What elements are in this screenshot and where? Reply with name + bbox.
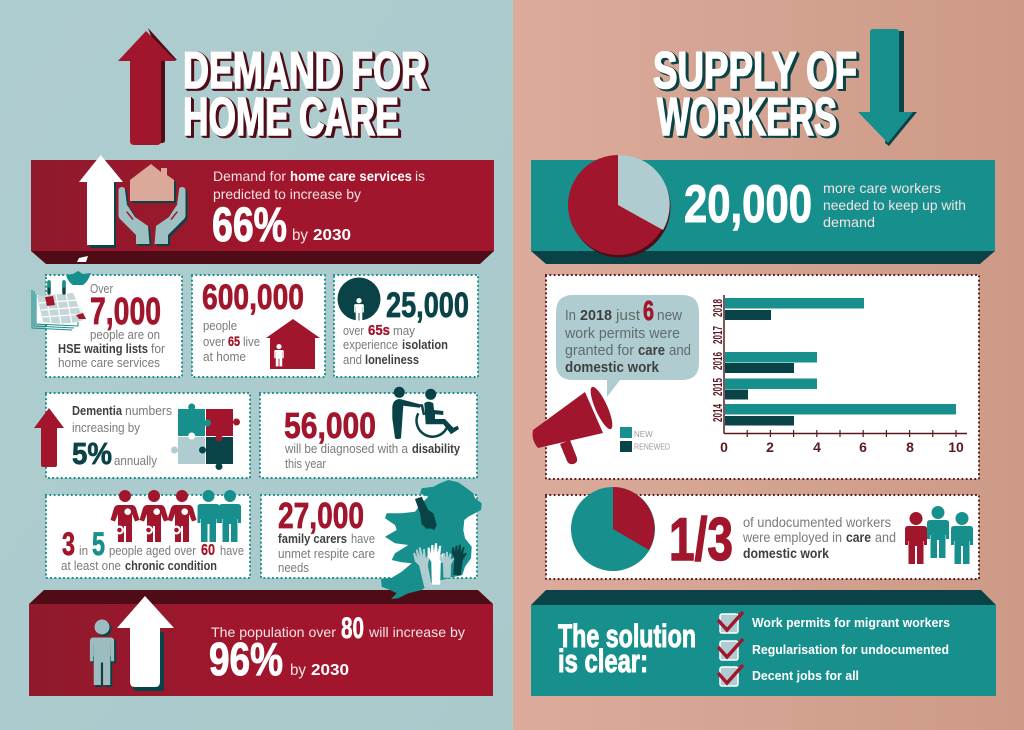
checklist item: decent jobs: Decent jobs for all [752, 668, 859, 683]
background: left half [0, 0, 513, 730]
icon: puzzle [171, 404, 240, 470]
checklist item: regularisation [718, 639, 949, 660]
panel: 20,000 banner [531, 155, 995, 264]
decorative chip [77, 256, 88, 262]
text: more care workers: demand [823, 214, 875, 230]
stat: 96% by 2030: 2030 [311, 662, 349, 679]
text: undocumented workers: of undocumented workers [743, 514, 891, 530]
chart: permits bar chart: 2018 [710, 299, 725, 317]
chart: permits bar chart: 2015 [710, 378, 725, 396]
text: 7,000 people [58, 281, 166, 370]
title: supply of workers: SUPPLY OF [653, 42, 857, 100]
callout: speech bubble: care [638, 342, 665, 359]
text: dementia numbers: annually [114, 453, 157, 468]
text: 27,000 carers: needs [278, 560, 309, 575]
text: 3 in 5 people: in [79, 543, 88, 558]
stat: 66% by 2030: 2030 [313, 227, 351, 244]
callout: speech bubble: In [565, 307, 576, 324]
text: demand predicted: home care services [290, 168, 412, 184]
chart: permits bar chart: 2014 [710, 404, 725, 422]
text: 3 in 5 people: people aged over [109, 543, 197, 558]
text: 600,000 people: over [203, 334, 226, 349]
text: demand predicted: Demand for [213, 168, 286, 184]
title: supply of workers: WORKERS [657, 87, 837, 147]
text: 7,000 people: home care services [58, 355, 160, 370]
text: 3 in 5 people: 60 [201, 542, 215, 559]
text: 3 in 5 people: chronic condition [125, 558, 217, 573]
text: undocumented workers: were employed in [742, 529, 842, 545]
text: 25,000 over 65s: and [343, 352, 362, 367]
chart: permits bar chart [710, 295, 967, 455]
icon: three people [905, 506, 973, 564]
panel: supply of workers heading [653, 29, 917, 147]
text: 7,000 people: people are on [90, 327, 160, 342]
legend [620, 427, 670, 452]
heading: the solution is clear: The solution [558, 618, 696, 654]
callout: speech bubble: and [669, 342, 691, 359]
text: 27,000 carers: 27,000 [278, 495, 364, 536]
panel: one third undocumented [546, 487, 979, 579]
text: 600,000 people: 600,000 [202, 278, 304, 317]
text: 7,000 people: 7,000 [90, 291, 161, 333]
panel: 3 in 5 chronic condition [46, 490, 250, 578]
text: 3 in 5 people [61, 526, 244, 573]
icon: house with person [266, 319, 320, 369]
icon: person [90, 620, 116, 687]
callout: speech bubble: 6 [643, 295, 654, 326]
text: 56,000 diagnosed [284, 405, 461, 471]
panel: work permits chart [533, 275, 979, 479]
heading: the solution is clear: is clear: [558, 643, 648, 679]
callout: speech bubble: granted for [565, 342, 634, 359]
stat: 66% by 2030 [212, 199, 351, 252]
text: 600,000 people [202, 278, 304, 364]
text: 25,000 over 65s: over [343, 323, 365, 338]
text: 25,000 over 65s: may [393, 323, 415, 338]
icon: red people with conditions [110, 490, 196, 542]
text: 600,000 people: 65 [228, 333, 240, 349]
text: demand predicted: is [415, 168, 425, 184]
background: right half [513, 0, 1024, 730]
text: population over 80: 80 [341, 612, 364, 645]
chart: permits bar chart: 2017 [710, 326, 725, 344]
text: undocumented workers [742, 514, 896, 561]
chart: permits bar chart: 0 [720, 439, 728, 455]
text: undocumented workers: and [875, 529, 896, 545]
chart: permits bar chart: 2016 [710, 352, 725, 370]
text: 7,000 people: Over [90, 281, 114, 296]
icon: red up arrow [34, 408, 64, 467]
stat: 1/3: 1/3 [669, 506, 733, 573]
text: 25,000 over 65s [343, 286, 469, 367]
stat: 20,000: 20,000 [684, 175, 812, 234]
text: undocumented workers: care [846, 529, 871, 545]
icon: down arrow [858, 29, 917, 146]
icon: megaphone [533, 385, 616, 464]
panel: 66% banner [31, 155, 494, 264]
icon: house in hands [118, 164, 188, 246]
panel: 27,000 family carers [261, 495, 477, 578]
callout: speech bubble: new [657, 307, 682, 324]
callout: speech bubble: just [615, 307, 641, 324]
chart: permits bar chart: 2 [766, 439, 774, 455]
title: supply of workers [653, 42, 857, 147]
title: demand for home care [183, 42, 427, 147]
text: 25,000 over 65s: isolation [402, 337, 448, 352]
stat: 96% by 2030 [209, 633, 349, 685]
panel: 7,000 waiting lists [32, 271, 182, 377]
text: 3 in 5 people: 3 [62, 526, 75, 562]
callout: speech bubble [556, 295, 699, 397]
text: more care workers: more care workers [823, 180, 941, 196]
text: demand predicted: predicted to increase by [213, 186, 361, 202]
checklist item: decent jobs [718, 665, 859, 686]
panel: 600,000 live at home [192, 275, 325, 377]
panel: demand for home care heading [118, 28, 427, 147]
checklist item: work permits [718, 612, 950, 633]
callout: speech bubble: 2018 [580, 307, 612, 324]
text: 56,000 diagnosed: this year [285, 456, 327, 471]
text: 25,000 over 65s: loneliness [365, 352, 419, 367]
heading: the solution is clear [558, 618, 696, 679]
panel: 96% banner [29, 590, 493, 696]
panel: 25,000 isolation [334, 275, 478, 377]
text: 3 in 5 people: 5 [92, 526, 105, 562]
text: 600,000 people: people [203, 318, 237, 333]
chart: one-third pie [571, 487, 655, 571]
text: 25,000 over 65s: 25,000 [386, 286, 469, 325]
chart: permits bar chart: 10 [948, 439, 964, 455]
text: 7,000 people: for [151, 341, 166, 356]
text: dementia numbers: 5% [72, 436, 112, 471]
text: more care workers: needed to keep up with [823, 197, 966, 213]
title: demand for home care: DEMAND FOR [183, 42, 427, 100]
icon: carer and wheelchair [392, 387, 459, 439]
icon: teal people [198, 490, 241, 542]
text: 56,000 diagnosed: will be diagnosed with a [284, 441, 409, 456]
chart: permits bar chart: 8 [906, 439, 914, 455]
icon: calendar [32, 271, 91, 330]
title: demand for home care: HOME CARE [183, 87, 399, 147]
text: 25,000 over 65s: 65s [368, 322, 390, 339]
icon: map of Ireland with hands [381, 480, 482, 599]
text: 27,000 carers: have [351, 531, 375, 546]
text: population over 80: The population over [211, 624, 336, 640]
legend: RENEWED [634, 442, 670, 452]
text: 3 in 5 people: have [220, 543, 244, 558]
text: dementia numbers [72, 403, 172, 471]
chart: pie with shadow [568, 155, 670, 258]
text: 56,000 diagnosed: disability [412, 441, 461, 456]
text: 27,000 carers [278, 495, 375, 575]
text: 600,000 people: live [243, 334, 260, 349]
chart: permits bar chart: 4 [813, 439, 821, 455]
text: population over 80: will increase by [368, 624, 465, 640]
text: dementia numbers: Dementia [72, 403, 123, 418]
text: 27,000 carers: unmet respite care [278, 546, 375, 561]
callout: speech bubble: domestic work [565, 359, 660, 376]
text: 56,000 diagnosed: 56,000 [284, 405, 376, 446]
text: undocumented workers: domestic work [743, 545, 829, 561]
icon: white up arrow [79, 155, 123, 248]
text: more care workers [823, 180, 966, 230]
text: 7,000 people: HSE waiting lists [58, 341, 148, 356]
checklist item: work permits: Work permits for migrant workers [752, 615, 950, 630]
text: 600,000 people: at home [203, 349, 246, 364]
checklist item: regularisation: Regularisation for undocumented [752, 642, 949, 657]
text: demand predicted [213, 168, 425, 202]
text: dementia numbers: increasing by [72, 420, 140, 435]
text: 3 in 5 people: at least one [61, 558, 121, 573]
callout: speech bubble: work permits were [564, 325, 680, 342]
stat: 66% by 2030: 66% [212, 199, 287, 252]
stat: 96% by 2030: by [290, 662, 306, 679]
stat: 66% by 2030: by [292, 227, 308, 244]
text: dementia numbers: numbers [125, 403, 172, 418]
icon: isolated person in circle [338, 278, 380, 321]
text: 27,000 carers: family carers [278, 531, 347, 546]
chart: permits bar chart: 6 [859, 439, 867, 455]
stat: 96% by 2030: 96% [209, 633, 283, 685]
panel: the solution banner [531, 590, 996, 696]
legend: NEW [634, 430, 653, 439]
icon: white up arrow [117, 596, 174, 691]
panel: dementia 5% [34, 393, 250, 478]
text: 25,000 over 65s: experience [343, 337, 398, 352]
text: population over 80 [211, 612, 465, 645]
panel: 56,000 disability [260, 387, 477, 478]
icon: up arrow [118, 28, 177, 145]
